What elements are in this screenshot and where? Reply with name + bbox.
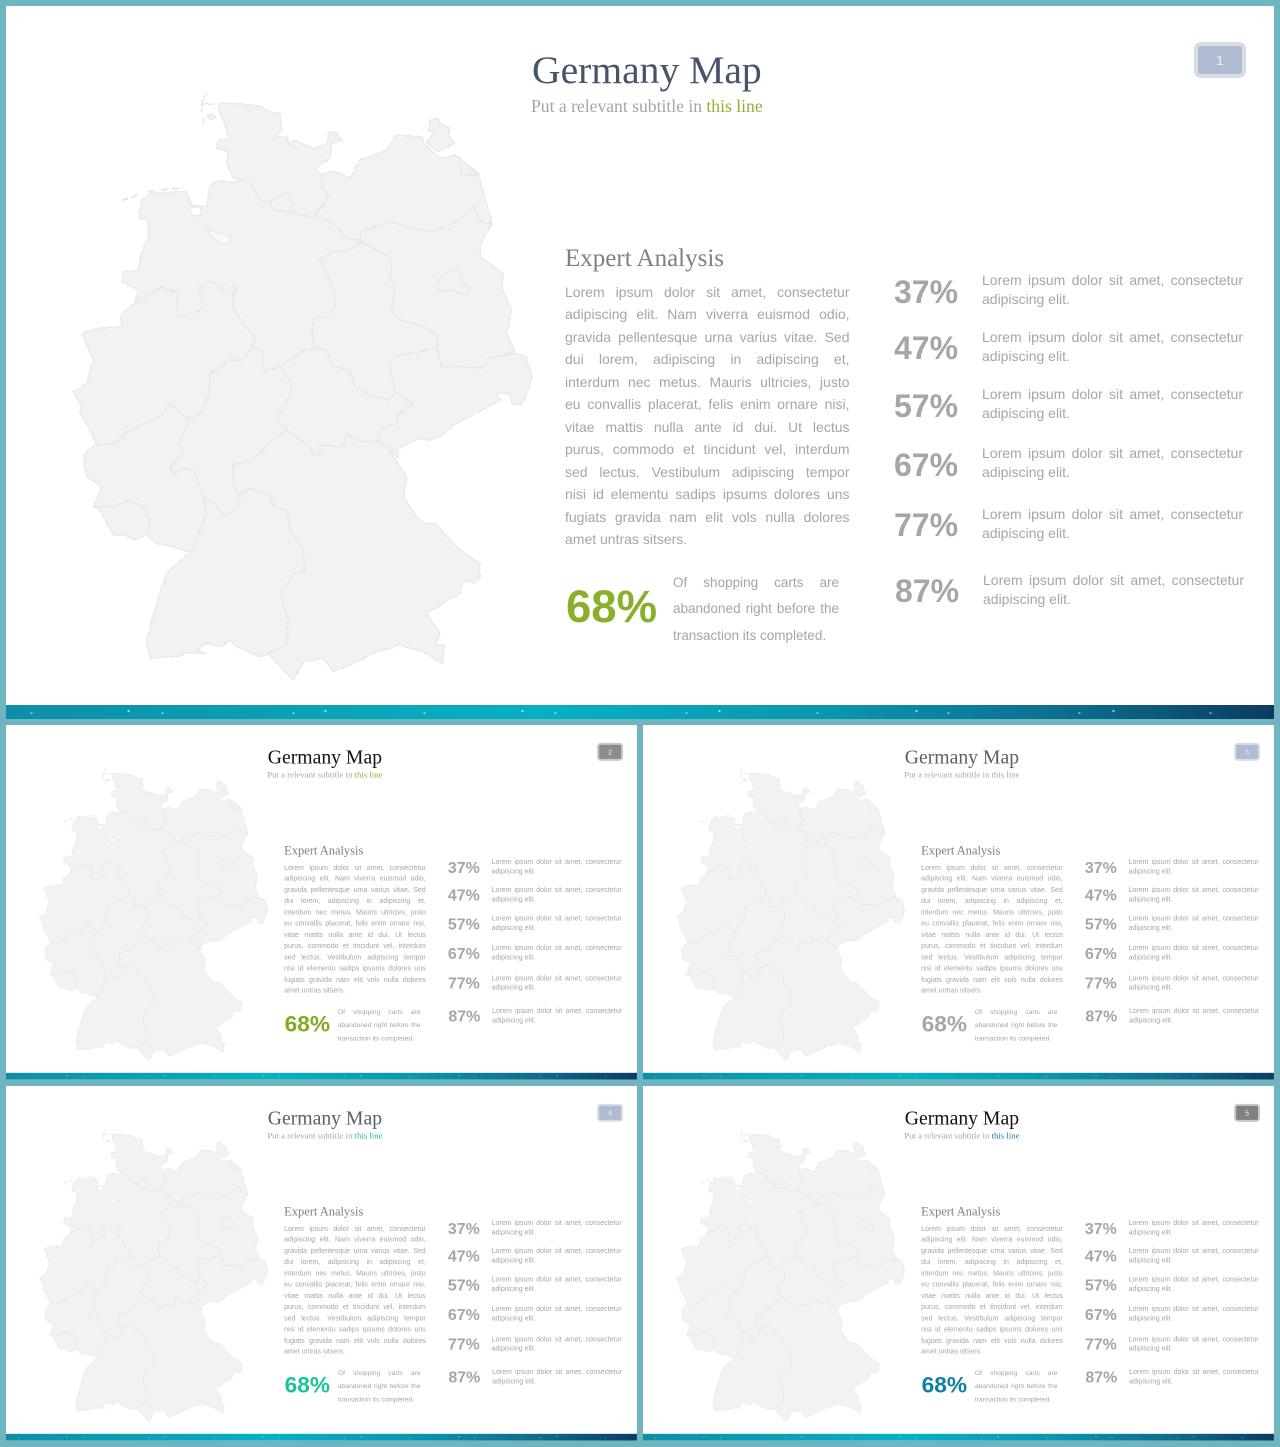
heading: expert analysis: Expert Analysis [565,245,724,272]
stat 57% text: adipiscing elit. [1129,923,1172,931]
key stat caption: transaction its completed. [673,628,826,643]
stat 87% text [492,1007,622,1024]
key stat caption: Of shopping carts are [975,1008,1058,1016]
stat 47%: 47% [1085,1247,1117,1265]
stat 87%: 87% [448,1007,480,1025]
stat 37%: 37% [448,1219,480,1237]
stat 57%: 57% [894,388,958,424]
subtitle: Put a relevant subtitle in this line [904,1131,1019,1141]
body text: eu convallis placerat, felis enim ornare nisi, [921,919,1063,927]
body text: purus, commodo et tincidunt vel, interdum [921,1303,1063,1311]
body text: adipiscing elit. Nam viverra euismod odio, [921,1236,1063,1243]
stat 67% text: Lorem ipsum dolor sit amet, consectetur [492,1304,622,1312]
stat 77% text [1129,1334,1259,1353]
stat 47% text: Lorem ipsum dolor sit amet, consectetur [1129,886,1259,894]
body text [921,1223,1063,1357]
stat 77% text: adipiscing elit. [1129,1344,1172,1352]
stat 57%: 57% [1085,1276,1117,1294]
body text: dui lorem, adipiscing in adipiscing et, [921,1258,1063,1266]
slide 1: main slide [6,6,1274,719]
key stat 68%: 68% [922,1372,967,1397]
stat 37%: 37% [448,858,480,876]
body text: Lorem ipsum dolor sit amet, consectetur [921,1224,1063,1232]
stat 67% text [492,1304,622,1322]
stat 37% text: Lorem ipsum dolor sit amet, consectetur [492,1218,622,1226]
stat 37% text: adipiscing elit. [982,290,1070,306]
stat 47%: 47% [448,1247,480,1265]
slide 3: grey variant [643,725,1274,1080]
stat 37% text [1129,1218,1259,1236]
stat 57% text: Lorem ipsum dolor sit amet, consectetur [1129,1275,1259,1283]
stat 47%: 47% [448,886,480,904]
page number badge [597,1104,623,1122]
stat 57% text [492,914,622,932]
stat 57% text [1128,914,1259,932]
stat 77% text: Lorem ipsum dolor sit amet, consectetur [492,1335,622,1343]
stat 57% text: Lorem ipsum dolor sit amet, consectetur [1129,914,1259,922]
body text: adipiscing elit. Nam viverra euismod odio, [565,306,850,322]
stat 77% text [492,1335,622,1352]
title: Germany Map [905,746,1019,768]
key stat 68%: 68% [285,1372,330,1397]
subtitle: Put a relevant subtitle in this line [904,770,1019,780]
stat 47% text: Lorem ipsum dolor sit amet, consectetur [982,329,1243,345]
stat 37% text: Lorem ipsum dolor sit amet, consectetur [1129,1218,1259,1226]
body text: fugiats gravida nam elit vols nulla dolores [921,1336,1063,1344]
body text: Lorem ipsum dolor sit amet, consectetur [921,863,1063,871]
key stat caption: Of shopping carts are [975,1369,1058,1377]
key stat caption [338,1369,421,1403]
stat 87% text: adipiscing elit. [1129,1377,1173,1385]
key stat caption: transaction its completed. [338,1034,414,1042]
stat 67% text: Lorem ipsum dolor sit amet, consectetur [982,445,1243,461]
body text: amet untras sitsers. [565,531,687,547]
stat 87% text: Lorem ipsum dolor sit amet, consectetur [492,1007,622,1015]
stat 57%: 57% [448,915,480,933]
footer gradient band [643,1434,1274,1441]
key stat caption: Of shopping carts are [338,1008,421,1016]
stat 67%: 67% [894,447,958,483]
stat 47% text [982,329,1243,364]
heading: expert analysis: Expert Analysis [921,1205,1000,1218]
body text: vitae mattis nulla ante id dui. Ut lectus [921,930,1063,938]
body text: fugiats gravida nam elit vols nulla dolores [284,975,426,983]
stat 77%: 77% [448,974,480,992]
stat 77% text: adipiscing elit. [1129,983,1172,991]
body text: fugiats gravida nam elit vols nulla dolores [921,975,1063,983]
stat 57% text: Lorem ipsum dolor sit amet, consectetur [982,386,1243,402]
stat 87%: 87% [448,1368,480,1386]
stat 47%: 47% [894,330,958,366]
body text: nisi id elementu sadips ipsums dolores uns [921,964,1063,972]
stat 87% text: adipiscing elit. [983,590,1071,606]
stat 87%: 87% [1085,1368,1117,1386]
body text: gravida pellentesque urna varius vitae. Sed [565,329,850,345]
body text [284,1224,426,1355]
stat 57% text: adipiscing elit. [1129,1284,1172,1292]
stat 67% text: Lorem ipsum dolor sit amet, consectetur [1129,1304,1259,1312]
subtitle: Put a relevant subtitle in this line [267,1131,382,1141]
stat 87%: 87% [895,573,959,609]
stat 67%: 67% [448,944,480,962]
stat 87% text: adipiscing elit. [492,1377,536,1385]
key stat caption: abandoned right before the [975,1021,1058,1029]
stat 87% text [492,1368,622,1385]
stat 47% text: Lorem ipsum dolor sit amet, consectetur [492,1247,622,1255]
key stat 68%: 68% [566,581,657,632]
stat 67%: 67% [1085,944,1117,962]
stat 77%: 77% [894,507,958,543]
stat 77% text: adipiscing elit. [492,983,535,991]
body text: vitae mattis nulla ante id dui. Ut lectus [921,1291,1063,1299]
map of Germany [39,768,268,1060]
stat 37% text [492,1218,622,1236]
body text [284,863,426,994]
map of Germany [39,1129,268,1422]
map of Germany [676,1129,906,1422]
stat 67% text: Lorem ipsum dolor sit amet, consectetur [492,943,622,951]
stat 87% text: Lorem ipsum dolor sit amet, consectetur [983,572,1244,588]
stat 57%: 57% [448,1276,480,1294]
body text: dui lorem, adipiscing in adipiscing et, [921,897,1063,905]
body text: nisi id elementu sadips ipsums dolores uns [284,1325,426,1333]
stat 37% text: adipiscing elit. [1129,867,1172,875]
body text: fugiats gravida nam elit vols nulla dolores [284,1336,426,1344]
stat 77% text: Lorem ipsum dolor sit amet, consectetur [492,974,622,982]
body text: vitae mattis nulla ante id dui. Ut lectus [565,419,850,435]
body text: purus, commodo et tincidunt vel, interdum [921,942,1063,950]
stat 47% text: Lorem ipsum dolor sit amet, consectetur [492,886,622,894]
stat 47% text: adipiscing elit. [1129,1256,1172,1264]
body text [565,284,850,547]
heading: expert analysis: Expert Analysis [284,1205,363,1218]
body text: adipiscing elit. Nam viverra euismod odio, [921,875,1063,882]
body text: sed lectus. Vestibulum adipiscing tempor [921,1314,1063,1322]
stat 77%: 77% [448,1335,480,1353]
stat 37% text: Lorem ipsum dolor sit amet, consectetur [982,272,1243,288]
slide 5: blue variant [643,1086,1274,1441]
key stat caption [673,575,839,643]
stat 67% text [492,943,622,961]
stat 67% text: adipiscing elit. [1129,1314,1172,1322]
stat 77%: 77% [1085,974,1117,992]
body text: sed lectus. Vestibulum adipiscing tempor [284,1314,426,1322]
stat 47% text [492,1247,622,1264]
stat 87% text [983,572,1244,607]
body text: gravida pellentesque urna varius vitae. Sed [921,1247,1063,1255]
body text: purus, commodo et tincidunt vel, interdum [565,441,850,457]
map of Germany with state borders [72,92,533,680]
stat 87% text: Lorem ipsum dolor sit amet, consectetur [1129,1368,1259,1376]
footer gradient band [6,1434,637,1441]
body text [921,863,1063,994]
body text: Lorem ipsum dolor sit amet, consectetur [284,863,426,871]
body text: amet untras sitsers. [284,986,345,994]
map of Germany [676,768,906,1060]
body text: nisi id elementu sadips ipsums dolores uns [921,1325,1063,1333]
body text: dui lorem, adipiscing in adipiscing et, [565,351,850,367]
key stat caption: abandoned right before the [338,1382,421,1390]
stat 77% text [1128,974,1259,991]
page number badge: 2 [608,748,612,756]
stat 57% text [1129,1275,1259,1293]
subtitle: Put a relevant subtitle in this line [267,770,382,780]
stat 87%: 87% [1085,1007,1117,1025]
stat 87% text: adipiscing elit. [1129,1016,1173,1024]
stat 67% text: adipiscing elit. [1129,953,1172,961]
stat 57% text: Lorem ipsum dolor sit amet, consectetur [492,914,622,922]
body text: eu convallis placerat, felis enim ornare nisi, [565,396,850,412]
stat 77% text: Lorem ipsum dolor sit amet, consectetur [1129,1335,1259,1343]
stat 47% text: adipiscing elit. [492,1256,535,1264]
page number badge: 5 [1245,1109,1249,1117]
body text: interdum nec metus. Mauris ultricies, justo [284,908,426,916]
key stat caption: transaction its completed. [338,1395,414,1403]
body text: nisi id elementu sadips ipsums dolores uns [565,486,850,502]
body text: vitae mattis nulla ante id dui. Ut lectus [284,1291,426,1299]
page number badge: 4 [608,1109,612,1117]
stat 67% text [982,445,1243,480]
body text: Lorem ipsum dolor sit amet, consectetur [284,1224,426,1232]
stat 77% text [982,506,1243,541]
slide 2: green variant [6,725,637,1080]
body text: sed lectus. Vestibulum adipiscing tempor [921,953,1063,961]
key stat caption: abandoned right before the [975,1382,1058,1390]
footer gradient band [643,1073,1274,1080]
body text: nisi id elementu sadips ipsums dolores uns [284,964,426,972]
page number badge: 1 [1216,52,1224,68]
stat 67% text [1128,943,1259,961]
footer gradient band [6,1073,637,1080]
body text: adipiscing elit. Nam viverra euismod odio, [284,875,426,882]
page number badge [1234,1104,1260,1122]
body text: eu convallis placerat, felis enim ornare nisi, [921,1280,1063,1288]
stat 57% text [492,1275,622,1292]
body text: interdum nec metus. Mauris ultricies, justo [565,374,850,390]
key stat 68%: 68% [285,1011,330,1036]
stat 37%: 37% [1085,858,1117,876]
stat 57% text: adipiscing elit. [982,404,1070,420]
page number badge: 3 [1245,748,1249,756]
stat 37%: 37% [894,274,958,310]
stat 57% text: adipiscing elit. [492,1284,535,1292]
stat 47%: 47% [1085,886,1117,904]
stat 37% text [1128,857,1259,875]
body text: gravida pellentesque urna varius vitae. Sed [921,886,1063,894]
body text: sed lectus. Vestibulum adipiscing tempor [284,953,426,961]
stat 87% text: adipiscing elit. [492,1016,536,1024]
body text: interdum nec metus. Mauris ultricies, justo [284,1269,426,1277]
body text: amet untras sitsers. [921,986,982,994]
body text: gravida pellentesque urna varius vitae. Sed [284,1247,426,1255]
stat 67% text: adipiscing elit. [982,464,1070,480]
stat 87% text: Lorem ipsum dolor sit amet, consectetur [1129,1007,1259,1015]
stat 57% text: Lorem ipsum dolor sit amet, consectetur [492,1275,622,1283]
key stat caption: transaction its completed. [975,1034,1051,1042]
stat 37% text: adipiscing elit. [492,1228,535,1236]
body text: dui lorem, adipiscing in adipiscing et, [284,897,426,905]
page number badge [1194,42,1246,78]
subtitle: Put a relevant subtitle in this line [531,96,763,116]
key stat caption: abandoned right before the [338,1021,421,1029]
key stat caption: Of shopping carts are [338,1369,421,1377]
body text: dui lorem, adipiscing in adipiscing et, [284,1258,426,1266]
stat 37% text [492,857,622,875]
stat 37% text: Lorem ipsum dolor sit amet, consectetur [492,857,622,865]
body text: Lorem ipsum dolor sit amet, consectetur [565,284,850,300]
stat 37% text: adipiscing elit. [492,867,535,875]
stat 87% text [1129,1367,1259,1386]
heading: expert analysis: Expert Analysis [284,844,363,857]
key stat caption: Of shopping carts are [673,575,839,590]
body text: purus, commodo et tincidunt vel, interdum [284,1303,426,1311]
stat 57% text: adipiscing elit. [492,923,535,931]
body text: amet untras sitsers. [284,1347,345,1355]
page number badge [597,743,623,761]
stat 47% text [1128,886,1259,903]
body text: interdum nec metus. Mauris ultricies, justo [921,1269,1063,1277]
body text: amet untras sitsers. [921,1347,982,1355]
body text: gravida pellentesque urna varius vitae. Sed [284,886,426,894]
key stat caption [975,1008,1058,1042]
stat 47% text: adipiscing elit. [492,895,535,903]
stat 47% text: adipiscing elit. [1129,895,1172,903]
body text: adipiscing elit. Nam viverra euismod odio, [284,1236,426,1243]
footer gradient band [6,705,1274,719]
stat 37% text: adipiscing elit. [1129,1228,1172,1236]
key stat caption [338,1008,421,1042]
stat 77% text: adipiscing elit. [492,1344,535,1352]
stat 47% text: Lorem ipsum dolor sit amet, consectetur [1129,1247,1259,1255]
stat 47% text: adipiscing elit. [982,348,1070,364]
title: Germany Map [268,746,382,768]
title: Germany Map [532,48,762,92]
stat 47% text [1129,1246,1259,1265]
stat 67%: 67% [448,1305,480,1323]
stat 77% text [492,974,622,991]
stat 67% text: Lorem ipsum dolor sit amet, consectetur [1129,943,1259,951]
key stat 68%: 68% [922,1011,967,1036]
stat 37% text [982,272,1243,307]
stat 57% text [982,386,1243,421]
stat 37%: 37% [1085,1219,1117,1237]
body text: eu convallis placerat, felis enim ornare nisi, [284,1280,426,1288]
stat 77% text: Lorem ipsum dolor sit amet, consectetur [982,506,1243,522]
body text: eu convallis placerat, felis enim ornare nisi, [284,919,426,927]
body text: vitae mattis nulla ante id dui. Ut lectus [284,930,426,938]
stat 77% text: adipiscing elit. [982,524,1070,540]
title: Germany Map [268,1107,382,1129]
title: Germany Map [905,1107,1019,1129]
stat 37% text: Lorem ipsum dolor sit amet, consectetur [1129,857,1259,865]
stat 67% text: adipiscing elit. [492,1314,535,1322]
page number badge [1234,743,1260,761]
slide 4: teal-green variant [6,1086,637,1441]
stat 67% text [1129,1304,1259,1322]
body text: sed lectus. Vestibulum adipiscing tempor [565,464,850,480]
stat 87% text [1129,1007,1259,1024]
stat 77% text: Lorem ipsum dolor sit amet, consectetur [1129,974,1259,982]
body text: interdum nec metus. Mauris ultricies, justo [921,908,1063,916]
stat 67%: 67% [1085,1305,1117,1323]
key stat caption: abandoned right before the [673,601,839,616]
body text: purus, commodo et tincidunt vel, interdum [284,942,426,950]
key stat caption [975,1367,1058,1406]
stat 57%: 57% [1085,915,1117,933]
stat 67% text: adipiscing elit. [492,953,535,961]
stat 47% text [492,886,622,903]
heading: expert analysis: Expert Analysis [921,844,1000,857]
stat 87% text: Lorem ipsum dolor sit amet, consectetur [492,1368,622,1376]
body text: fugiats gravida nam elit vols nulla dolores [565,509,850,525]
key stat caption: transaction its completed. [975,1395,1051,1403]
stat 77%: 77% [1085,1335,1117,1353]
